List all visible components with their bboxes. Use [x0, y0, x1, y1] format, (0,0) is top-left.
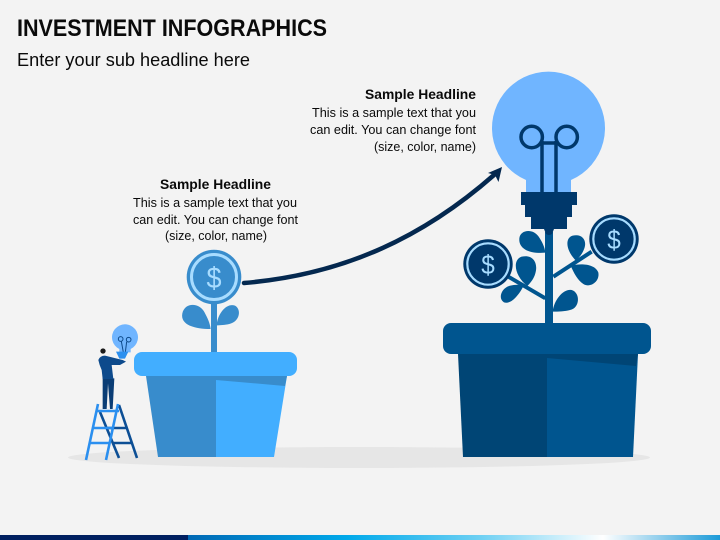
bottom bar gradient: [188, 535, 720, 540]
bulb glass: [492, 72, 605, 193]
left coin: $: [481, 251, 495, 280]
text block: large plant: Sample Headline: [365, 86, 476, 102]
text block: large plant: can edit. You can change font: [310, 122, 476, 137]
small coin: $: [206, 262, 222, 295]
text block: small plant: Sample Headline: [160, 176, 271, 192]
small pot rim: [134, 352, 297, 376]
text block: small plant: [133, 176, 298, 243]
large pot body: [458, 354, 638, 457]
large stem: [545, 232, 553, 324]
left coin: [463, 239, 513, 289]
bulb base: [521, 192, 577, 235]
large plant: [443, 214, 651, 457]
small bulb: [112, 324, 138, 359]
ladder: [86, 404, 137, 460]
text block: large plant: (size, color, name): [374, 139, 476, 154]
text block: small plant: (size, color, name): [165, 228, 267, 243]
subtitle: Enter your sub headline here: [17, 50, 250, 70]
large light bulb: [492, 72, 605, 235]
person on ladder with bulb: [86, 324, 138, 460]
right coin: $: [607, 226, 621, 255]
text block: small plant: This is a sample text that you: [133, 195, 297, 210]
text block: small plant: can edit. You can change font: [133, 212, 298, 227]
person: [98, 324, 138, 409]
small pot body: [146, 376, 287, 457]
bottom bar dark: [0, 535, 188, 540]
text block: large plant: [310, 86, 476, 154]
ground shadow: [68, 447, 650, 468]
title: INVESTMENT INFOGRAPHICS: [17, 15, 327, 42]
small coin: [187, 250, 241, 304]
small stem: [211, 300, 217, 354]
large pot rim: [443, 323, 651, 354]
right coin: [589, 214, 639, 264]
small plant: [134, 250, 297, 457]
growth arrow: [244, 167, 502, 283]
small leaves: [182, 305, 239, 329]
text block: large plant: This is a sample text that you: [312, 105, 476, 120]
branches and leaves: [501, 231, 599, 312]
filament: [521, 126, 577, 193]
